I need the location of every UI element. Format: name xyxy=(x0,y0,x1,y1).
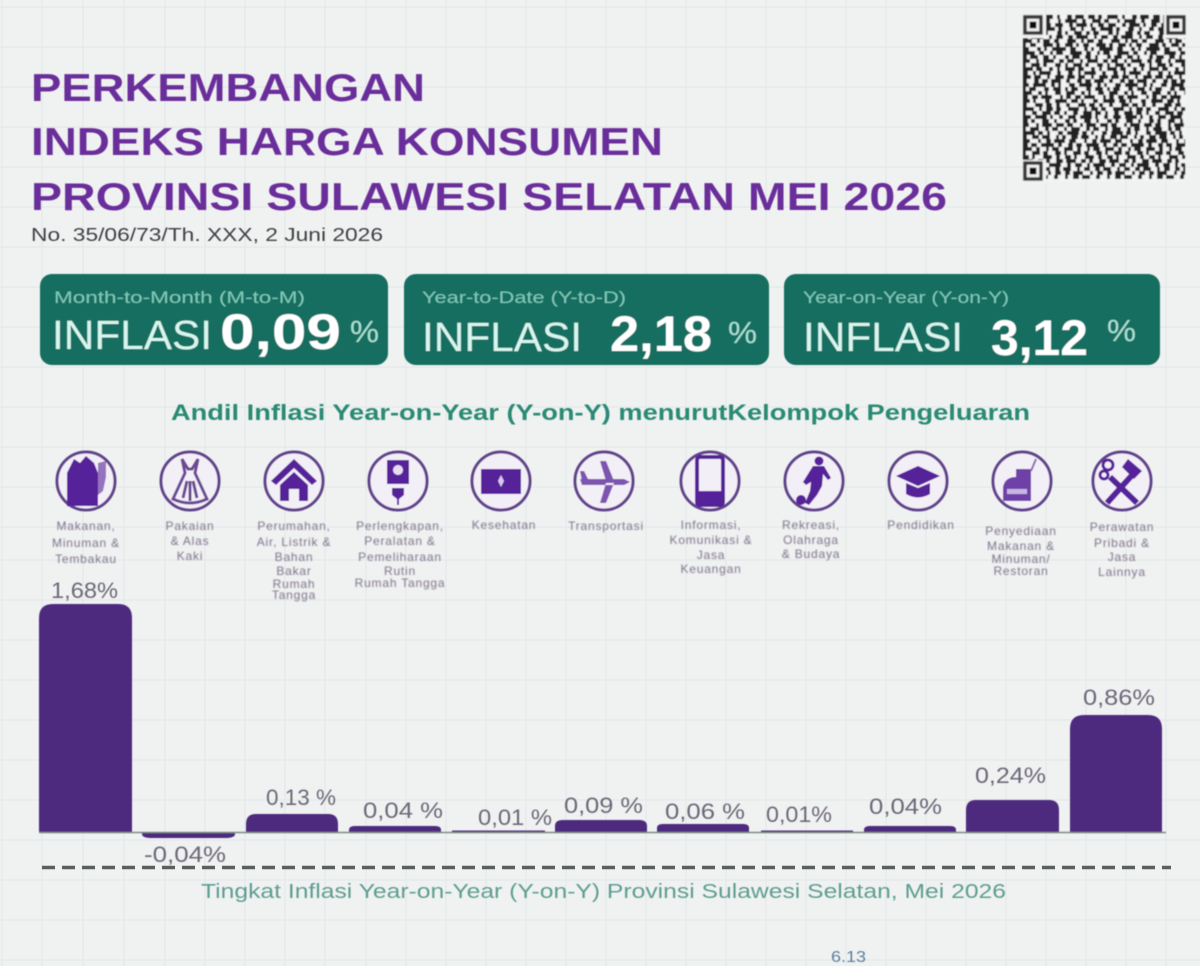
heading: provincial inflation rate: Tingkat Inflasi Year-on-Year (Y-on-Y) Provinsi Sulawesi Selatan, Mei 2026 xyxy=(201,881,1006,903)
panel: year-on-year inflation xyxy=(784,274,1160,366)
icon: house xyxy=(265,452,323,510)
category labels: Jasa xyxy=(1108,550,1136,564)
panel: month-to-month inflation xyxy=(40,274,388,365)
category labels: Pribadi & xyxy=(1094,536,1150,550)
category labels: Peralatan & xyxy=(364,534,436,548)
bar chart: contribution to inflation: 0,04% xyxy=(869,794,942,819)
panel: year-on-year inflation: % xyxy=(1107,313,1136,348)
category labels: Tembakau xyxy=(55,552,117,566)
bar chart: contribution to inflation: 1,68% xyxy=(51,578,118,603)
panel: year-on-year inflation: 3,12 xyxy=(991,310,1088,366)
icon: plug appliance xyxy=(369,452,427,510)
icon: dress xyxy=(161,452,219,510)
category labels: Tangga xyxy=(272,588,316,602)
category labels: Minuman & xyxy=(52,536,120,550)
panel: year-on-year inflation: Year-on-Year (Y-on-Y) xyxy=(803,288,1009,307)
category labels: Kaki xyxy=(177,549,203,563)
panel: year-to-date inflation xyxy=(404,274,769,365)
panel: month-to-month inflation: INFLASI xyxy=(52,312,212,358)
category labels: Minuman/ xyxy=(991,552,1051,566)
panel: year-to-date inflation: INFLASI xyxy=(422,314,582,360)
bar chart: contribution to inflation xyxy=(39,578,1166,867)
category labels: & Budaya xyxy=(782,547,840,561)
category labels: Bakar xyxy=(276,564,312,578)
bar chart: contribution to inflation: 0,24% xyxy=(975,763,1046,788)
category labels: Jasa xyxy=(697,548,725,562)
panel: month-to-month inflation: Month-to-Month (M-to-M) xyxy=(54,288,305,307)
title xyxy=(31,67,947,219)
icon row xyxy=(57,452,1151,510)
category labels: Makanan & xyxy=(987,539,1055,553)
icon: groceries xyxy=(57,452,115,510)
category labels: Rekreasi, xyxy=(782,518,840,532)
category labels: Kesehatan xyxy=(472,518,536,532)
bar chart: contribution to inflation: 0,13 % xyxy=(266,785,336,810)
category labels: Penyediaan xyxy=(985,524,1057,538)
panel: year-to-date inflation: 2,18 xyxy=(610,306,712,362)
category labels: Perawatan xyxy=(1090,520,1154,534)
bar chart: contribution to inflation: 0,06 % xyxy=(665,799,745,824)
icon: graduation cap xyxy=(889,452,947,510)
category labels: Keuangan xyxy=(680,562,742,576)
category labels: Informasi, xyxy=(681,518,741,532)
category labels: Perumahan, xyxy=(257,519,331,533)
title: PERKEMBANGAN xyxy=(31,67,425,110)
panel: year-to-date inflation: % xyxy=(728,315,757,350)
bar chart: contribution to inflation: 0,86% xyxy=(1083,685,1155,710)
panel: month-to-month inflation: % xyxy=(350,314,379,349)
icon: football player xyxy=(785,452,843,510)
cropped chart value: 6.13 xyxy=(831,949,866,966)
category labels: & Alas xyxy=(171,534,209,548)
QR code xyxy=(1023,15,1187,183)
category labels: Bahan xyxy=(275,550,313,564)
icon: restaurant meal xyxy=(993,452,1051,510)
panel: year-on-year inflation: INFLASI xyxy=(803,314,963,360)
bar chart: contribution to inflation: 0,01 % xyxy=(478,805,552,830)
category labels xyxy=(52,518,1154,602)
category labels: Transportasi xyxy=(568,519,644,533)
category labels: Rumah Tangga xyxy=(355,576,445,590)
title: INDEKS HARGA KONSUMEN xyxy=(31,121,663,164)
category labels: Restoran xyxy=(993,564,1049,578)
bar chart: contribution to inflation: -0,04% xyxy=(144,842,226,867)
bar chart: contribution to inflation: 0,01% xyxy=(766,802,832,827)
icon: smartphone xyxy=(681,452,739,510)
title: PROVINSI SULAWESI SELATAN MEI 2026 xyxy=(31,176,947,219)
panel: year-to-date inflation: Year-to-Date (Y-to-D) xyxy=(422,288,626,307)
panel: month-to-month inflation: 0,09 xyxy=(220,304,341,360)
category labels: Pendidikan xyxy=(887,518,955,532)
category labels: Olahraga xyxy=(783,533,839,547)
icon: health card xyxy=(472,452,530,510)
category labels: Air, Listrik & xyxy=(257,535,331,549)
bar chart: contribution to inflation: 0,04 % xyxy=(363,798,443,823)
bar chart: contribution to inflation: 0,09 % xyxy=(564,793,643,818)
icon: airplane xyxy=(575,452,633,510)
icon: scissors and comb xyxy=(1093,452,1151,510)
category labels: Pakaian xyxy=(166,519,214,533)
release number and date: No. 35/06/73/Th. XXX, 2 Juni 2026 xyxy=(31,225,383,245)
category labels: Lainnya xyxy=(1098,565,1146,579)
category labels: Komunikasi & xyxy=(670,533,752,547)
category labels: Rutin xyxy=(384,564,416,578)
category labels: Rumah xyxy=(273,577,315,591)
heading: contribution by expenditure group: Andil Inflasi Year-on-Year (Y-on-Y) menurutKelompok Pengeluaran xyxy=(171,400,1030,425)
category labels: Perlengkapan, xyxy=(356,519,444,533)
category labels: Pemeliharaan xyxy=(358,550,442,564)
category labels: Makanan, xyxy=(56,519,116,533)
